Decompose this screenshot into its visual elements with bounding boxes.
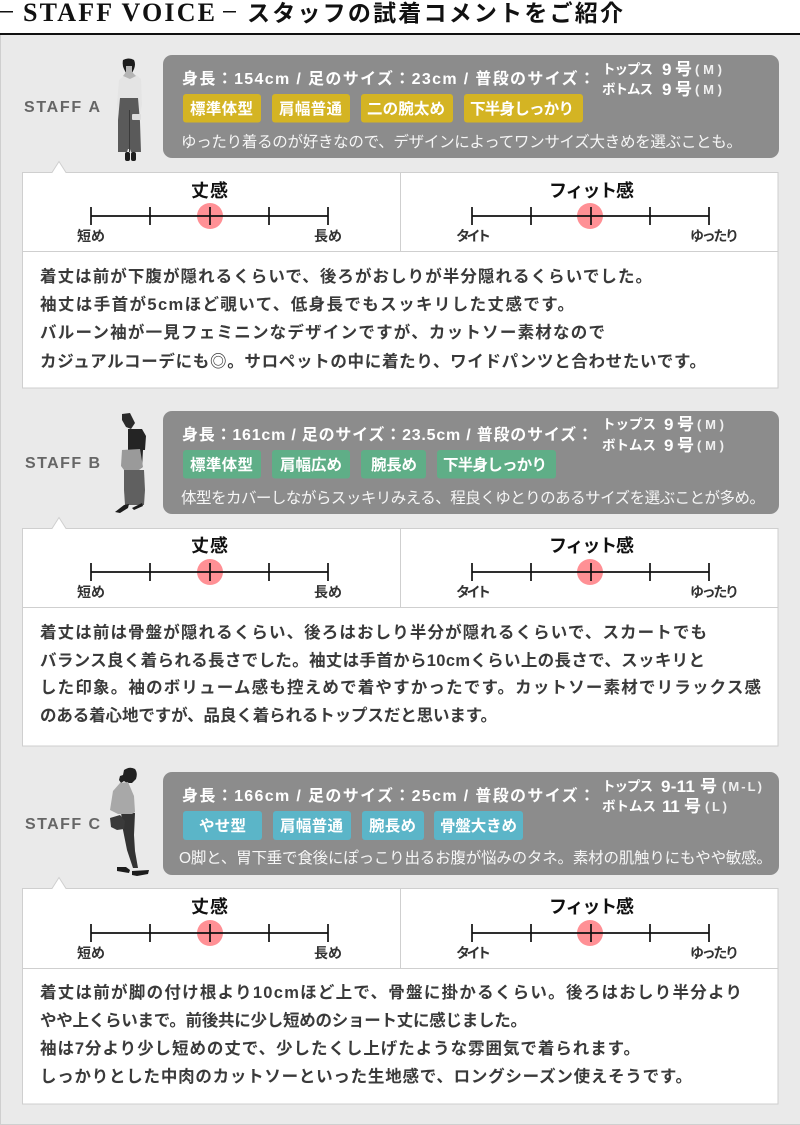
note: 体型をカバーしながらスッキリみえる、程良くゆとりのあるサイズを選ぶことが多め。 — [181, 489, 765, 507]
body type tags: 標準体型 — [190, 99, 253, 118]
panel: staff C — [22, 768, 779, 1104]
body type tags: 肩幅広め — [280, 456, 342, 474]
body type tags — [183, 811, 523, 840]
usual sizes: ボトムス — [602, 438, 656, 453]
info card — [163, 55, 779, 158]
review box — [22, 162, 778, 388]
body type tags: 下半身しっかり — [470, 100, 574, 118]
fit scale — [456, 896, 739, 961]
comment text — [40, 266, 706, 371]
length scale — [77, 180, 342, 244]
comment text: 袖は7分より少し短めの丈で、少したくし上げたような雰囲気で着られます。 — [40, 1038, 640, 1058]
info card — [163, 411, 779, 514]
fit scale: フィット感 — [549, 180, 634, 201]
body type tags: 腕長め — [371, 456, 417, 474]
fit scale: フィット感 — [549, 535, 634, 556]
length scale: 長め — [314, 584, 342, 600]
staff B label: STAFF B — [25, 455, 100, 472]
note: ゆったり着るのが好きなので、デザインによってワンサイズ大きめを選ぶことも。 — [181, 132, 742, 151]
comment text: のある着心地ですが、品良く着られるトップスだと思います。 — [40, 705, 497, 725]
comment text: しっかりとした中肉のカットソーといった生地感で、ロングシーズン使えそうです。 — [40, 1066, 692, 1086]
usual sizes: (M) — [695, 82, 722, 97]
usual sizes: ボトムス — [602, 799, 656, 814]
length scale: 短め — [77, 228, 105, 244]
fit scale: ゆったり — [690, 584, 739, 600]
comment text — [40, 982, 742, 1086]
comment text: 着丈は前が下腹が隠れるくらいで、後ろがおしりが半分隠れるくらいでした。 — [40, 266, 652, 286]
body type tags — [183, 450, 556, 478]
usual sizes: 9 号 — [662, 80, 692, 99]
fit scale: タイト — [456, 584, 491, 600]
length scale — [77, 896, 342, 961]
panel: staff A — [22, 55, 779, 388]
length scale: 長め — [314, 945, 342, 961]
fit scale: タイト — [456, 945, 491, 961]
comment text: やや上くらいまで。前後共に少し短めのショート丈に感じました。 — [40, 1010, 527, 1030]
body type tags: 肩幅普通 — [279, 99, 342, 118]
length scale — [77, 535, 342, 600]
body type tags — [183, 94, 583, 122]
length scale: 長め — [314, 228, 342, 244]
staff C label: STAFF C — [25, 816, 100, 833]
usual sizes: 9 号 — [662, 60, 692, 79]
usual sizes: (M) — [697, 417, 724, 432]
comment text: バランス良く着られる長さでした。袖丈は手首から10cmくらい上の長さで、スッキリと — [40, 650, 705, 670]
title — [0, 0, 623, 27]
body type tags: やせ型 — [199, 817, 246, 835]
fit scale: フィット感 — [549, 896, 634, 917]
length scale: 丈感 — [191, 535, 228, 556]
review box — [22, 878, 778, 1104]
body type tags: 肩幅普通 — [280, 816, 343, 835]
usual sizes: 9-11 号 — [661, 777, 717, 796]
usual sizes — [602, 777, 762, 816]
length scale: 丈感 — [191, 180, 228, 201]
note: O脚と、胃下垂で食後にぽっこり出るお腹が悩みのタネ。素材の肌触りにもやや敏感。 — [179, 849, 772, 867]
title: スタッフの試着コメントをご紹介 — [247, 0, 623, 26]
review box — [22, 518, 778, 746]
icon: staff B photo — [115, 413, 146, 513]
body type tags: 骨盤大きめ — [440, 816, 517, 835]
usual sizes: 9 号 — [664, 436, 694, 455]
comment text — [40, 622, 762, 725]
usual sizes — [602, 60, 722, 99]
usual sizes: (L) — [705, 799, 727, 814]
comment text: 着丈は前は骨盤が隠れるくらい、後ろはおしり半分が隠れるくらいで、スカートでも — [40, 622, 707, 642]
length scale: 丈感 — [191, 896, 228, 917]
icon: staff A photo — [117, 58, 142, 161]
body type tags: 下半身しっかり — [443, 456, 547, 474]
length scale: 短め — [77, 584, 105, 600]
usual sizes: (M-L) — [722, 779, 762, 794]
panel: staff B — [22, 411, 779, 746]
fit scale: ゆったり — [690, 228, 739, 244]
fit scale — [456, 535, 739, 600]
usual sizes: ボトムス — [602, 82, 653, 97]
usual sizes: トップス — [602, 417, 656, 432]
measurements: 身長：161cm / 足のサイズ：23.5cm / 普段のサイズ： — [182, 425, 593, 444]
length scale: 短め — [77, 945, 105, 961]
staff A label: STAFF A — [24, 99, 100, 116]
usual sizes — [602, 415, 724, 455]
usual sizes: (M) — [695, 62, 722, 77]
measurements: 身長：154cm / 足のサイズ：23cm / 普段のサイズ： — [182, 69, 595, 88]
usual sizes: 9 号 — [664, 415, 694, 434]
usual sizes: (M) — [697, 438, 724, 453]
comment text: バルーン袖が一見フェミニンなデザインですが、カットソー素材なので — [40, 322, 605, 342]
info card — [163, 772, 779, 875]
comment text: カジュアルコーデにも◎。サロペットの中に着たり、ワイドパンツと合わせたいです。 — [40, 351, 706, 371]
body type tags: 標準体型 — [190, 455, 253, 474]
fit scale: ゆったり — [690, 945, 739, 961]
usual sizes: トップス — [602, 779, 653, 794]
measurements: 身長：166cm / 足のサイズ：25cm / 普段のサイズ： — [182, 786, 595, 805]
fit scale: タイト — [456, 228, 491, 244]
body type tags: 二の腕太め — [367, 100, 445, 118]
comment text: 着丈は前が脚の付け根より10cmほど上で、骨盤に掛かるくらい。後ろはおしり半分より — [40, 982, 742, 1002]
fit scale — [456, 180, 739, 244]
usual sizes: トップス — [602, 62, 653, 77]
comment text: 袖丈は手首が5cmほど覗いて、低身長でもスッキリした丈感です。 — [40, 294, 574, 314]
icon: staff C photo — [110, 768, 149, 876]
comment text: した印象。袖のボリューム感も控えめで着やすかったです。カットソー素材でリラックス感 — [40, 677, 762, 697]
body type tags: 腕長め — [369, 817, 416, 835]
usual sizes: 11 号 — [662, 797, 701, 816]
